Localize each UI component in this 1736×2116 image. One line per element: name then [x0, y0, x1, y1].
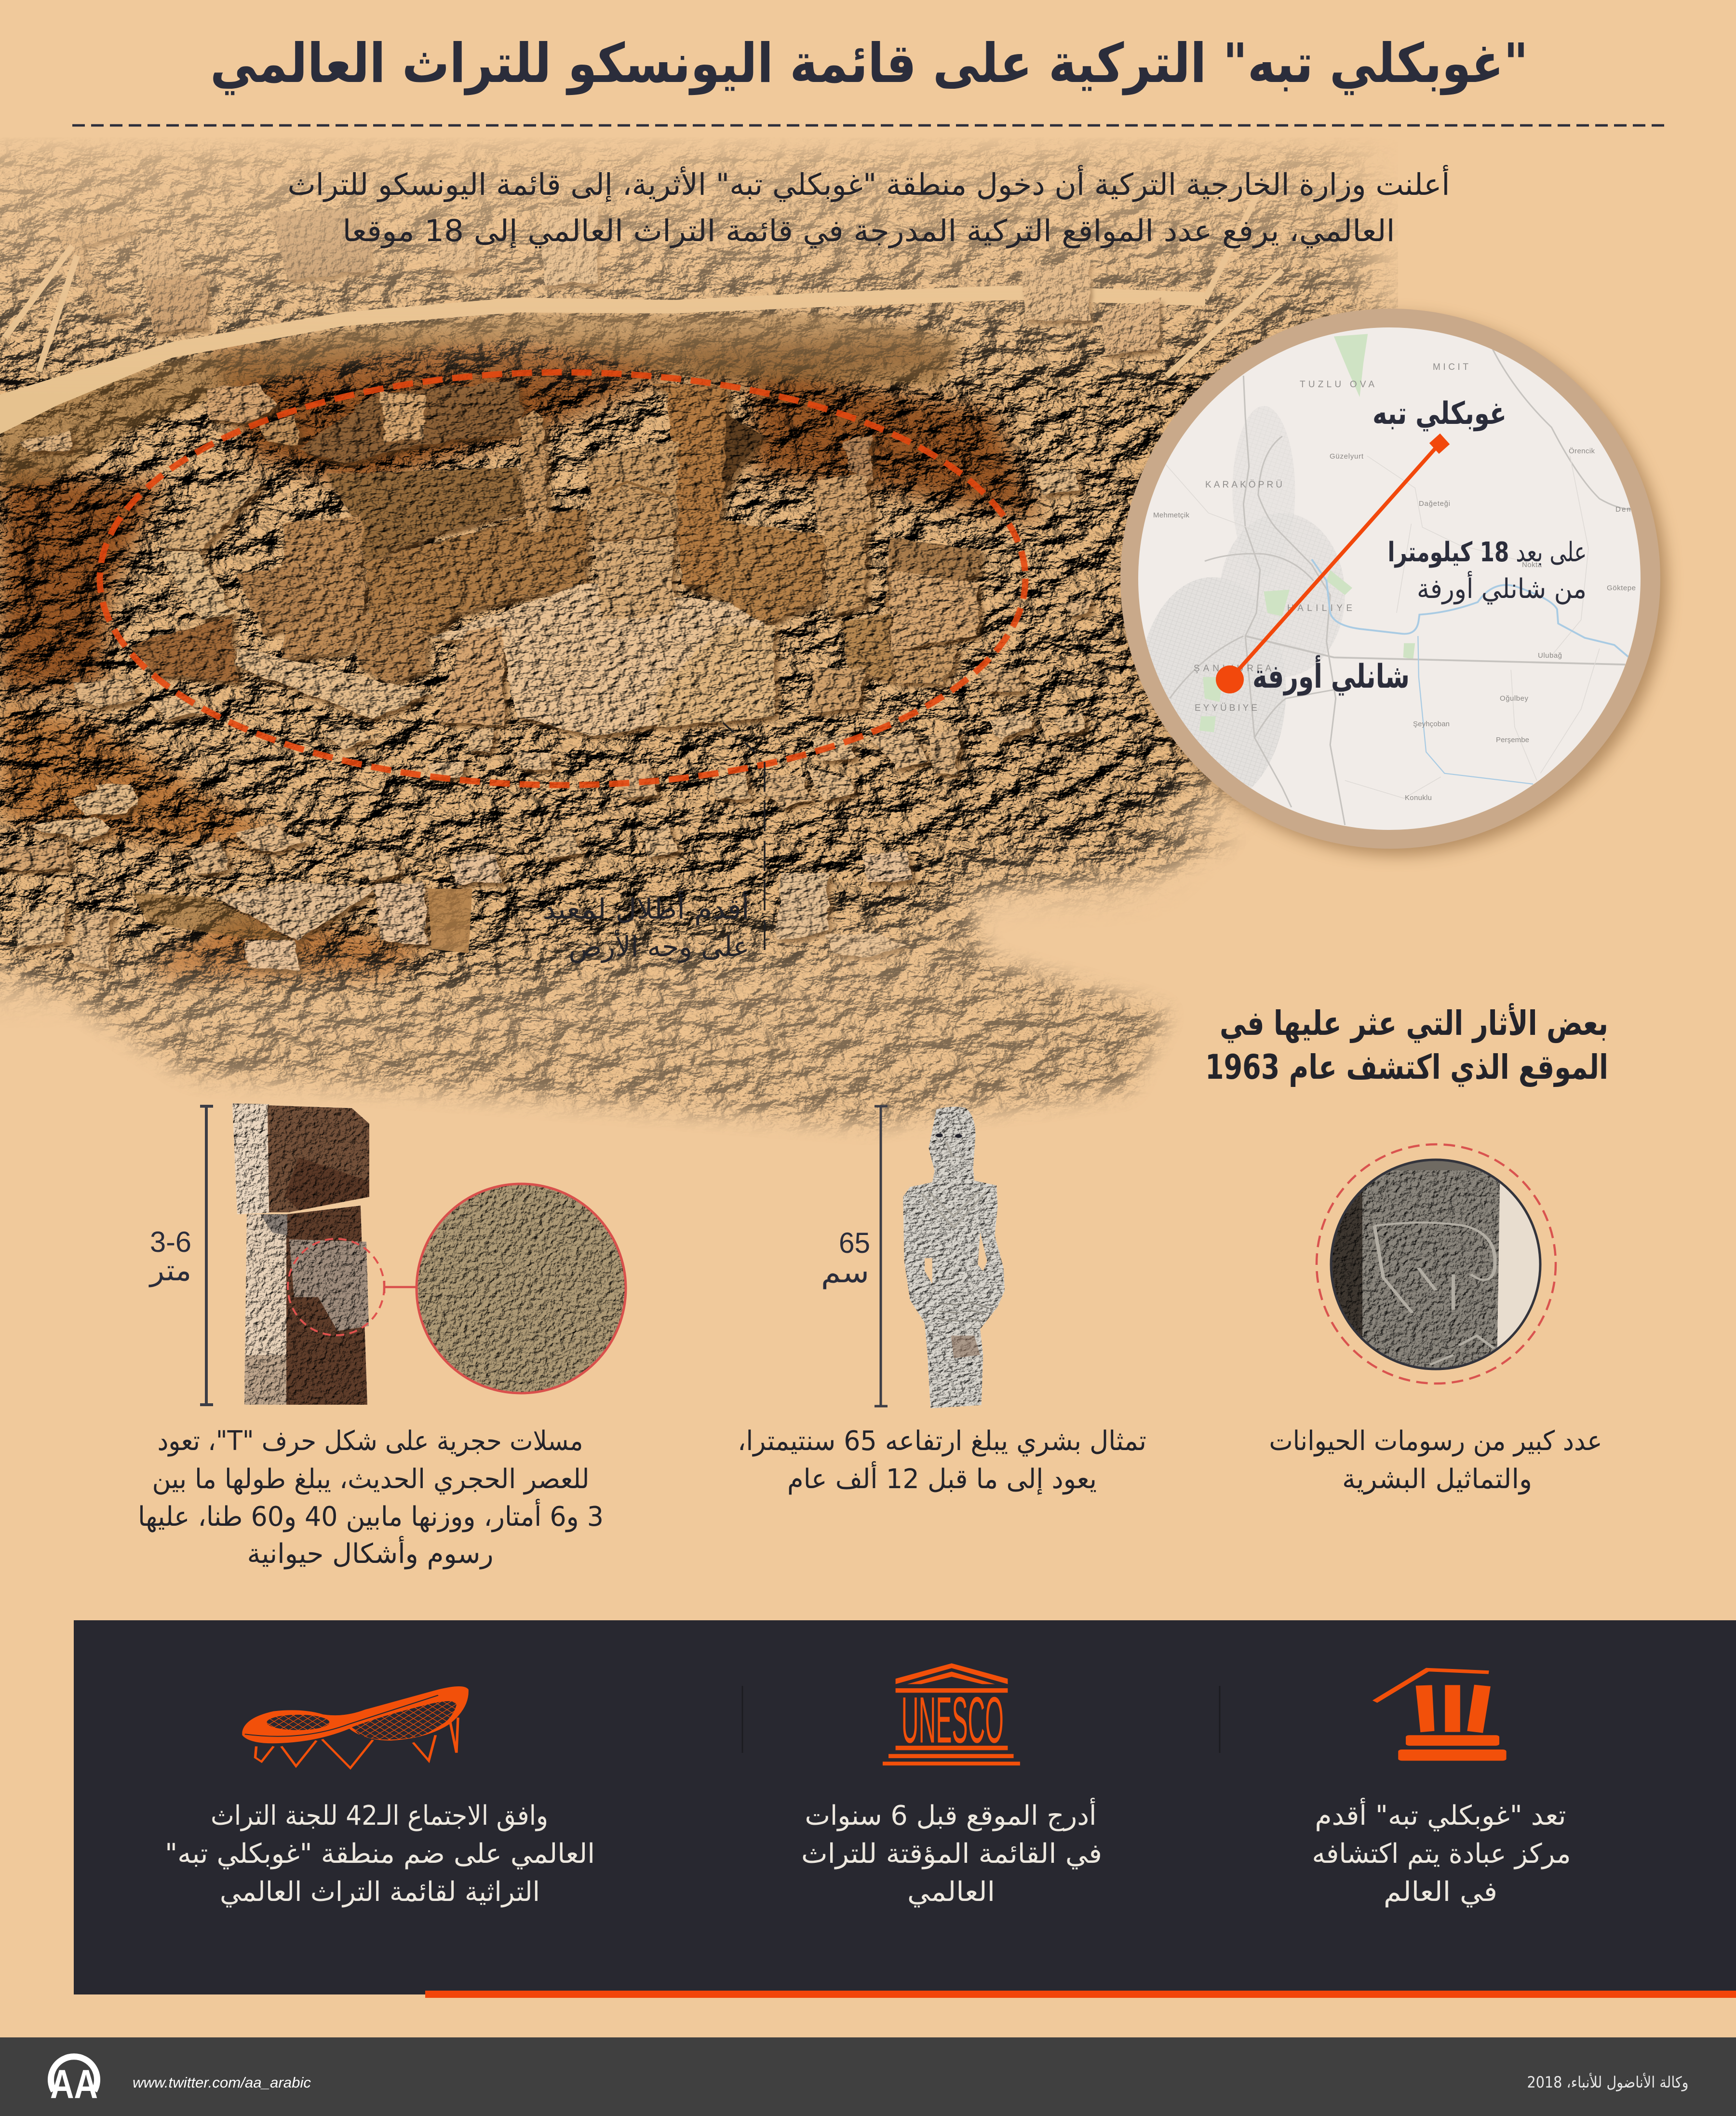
- front stones: [657, 625, 775, 727]
- fact 2: العالمي: [907, 1876, 995, 1908]
- map place names: ŞANLIURFA: [1194, 664, 1271, 674]
- fact 2: في القائمة المؤقتة للتراث: [801, 1838, 1102, 1870]
- marker: Gobekli Tepe: [1429, 434, 1450, 454]
- artifact: T-shaped pillar: [138, 1103, 626, 1570]
- icon: UNESCO: [883, 1663, 1020, 1765]
- animal relief on T pillar: [601, 482, 668, 496]
- fact 1: [165, 1800, 595, 1908]
- map place names: Güzelyurt: [1330, 452, 1364, 461]
- narrow pillar: [519, 410, 549, 532]
- map place names: Nokta: [1522, 561, 1542, 569]
- zoom circle on pillar: [288, 1239, 384, 1335]
- dashed ellipse around temple: [100, 372, 1025, 785]
- dark hollows and excavated walls: [0, 333, 1041, 984]
- top pillars: [380, 392, 424, 441]
- pillar description: [138, 1425, 604, 1570]
- loose foreground stones: [29, 818, 111, 841]
- map place names: Dağeteği: [1419, 500, 1450, 508]
- carving frame: [1331, 1160, 1540, 1369]
- map label: Gobekli Tepe: غوبكلي تبه: [1373, 396, 1507, 432]
- height label: [821, 1227, 870, 1289]
- carving description: والتماثيل البشرية: [1342, 1464, 1532, 1495]
- map label: distance: على بعد 18 كيلومترا: [1387, 537, 1587, 568]
- statue description: [738, 1425, 1146, 1495]
- callout: leader line and temple label: على وجه الأرض: [569, 929, 749, 963]
- map label: distance: من شانلي أورفة: [1417, 571, 1587, 605]
- map place names: Şeyhçoban: [1413, 720, 1450, 728]
- map place names: Konuklu: [1405, 794, 1432, 802]
- map place names: KARAKÖPRÜ: [1205, 480, 1282, 490]
- panel: location map: [1120, 309, 1660, 849]
- section heading: artifacts: بعض الأثار التي عثر عليها في: [1220, 1003, 1608, 1044]
- shadow grasses: [133, 893, 292, 940]
- upper walkway shadow: [0, 313, 964, 487]
- statue description: يعود إلى ما قبل 12 ألف عام: [787, 1461, 1097, 1495]
- title divider: [72, 124, 1668, 126]
- fact 1: التراثية لقائمة التراث العالمي: [220, 1876, 540, 1908]
- carving description: عدد كبير من رسومات الحيوانات: [1269, 1425, 1602, 1457]
- wooden supports: [5, 183, 1282, 376]
- dashed ring: [1317, 1144, 1556, 1384]
- copyright: وكالة الأناضول للأنباء، 2018: [1527, 2073, 1688, 2091]
- wooden walkway in ring: [159, 482, 263, 551]
- map place names: Perşembe: [1496, 736, 1529, 744]
- height label: متر: [148, 1254, 191, 1288]
- panel: key facts: UNESCO: [902, 1683, 1004, 1757]
- right stones: [886, 538, 980, 609]
- flat slab in foreground: [214, 882, 378, 940]
- pillar description: رسوم وأشكال حيوانية: [247, 1536, 494, 1570]
- artifact: animal carvings: [1269, 1144, 1602, 1495]
- carving description: [1269, 1425, 1602, 1495]
- fact 3: مركز عبادة يتم اكتشافه: [1312, 1838, 1571, 1870]
- height label: [148, 1226, 191, 1288]
- main ring stones: [0, 380, 1090, 971]
- relief ring: [417, 1184, 626, 1393]
- relief close-up: [417, 1184, 626, 1393]
- inner dark wall: [299, 380, 524, 462]
- fact 1: وافق الاجتماع الـ42 للجنة التراث: [211, 1800, 548, 1831]
- upper stones and tripods: [56, 205, 1160, 354]
- footer: [0, 2037, 1736, 2116]
- carving photo: [1331, 1160, 1541, 1370]
- pillar description: مسلات حجرية على شكل حرف "T"، تعود: [157, 1425, 583, 1457]
- height scale bar: [875, 1106, 888, 1406]
- title: "غوبكلي تبه" التركية على قائمة اليونسكو للتراث العالمي: [210, 32, 1528, 95]
- height label: 3-6: [150, 1226, 191, 1258]
- section heading: artifacts: الموقع الذي اكتشف عام 1963: [1205, 1047, 1608, 1087]
- map place names: Örencik: [1569, 447, 1595, 455]
- section heading: artifacts: [1205, 1003, 1608, 1087]
- route line: [1230, 444, 1440, 679]
- map frame: [1120, 309, 1660, 849]
- ring floor: [428, 583, 775, 736]
- height label: 65: [839, 1227, 870, 1259]
- upper walkway boards: [0, 285, 1205, 434]
- map place names: HALILIYE: [1287, 603, 1352, 613]
- fact 1: العالمي على ضم منطقة "غوبكلي تبه": [165, 1838, 595, 1870]
- curved stone wall: [365, 508, 587, 635]
- right inner wall: [705, 518, 826, 624]
- map place names: Mehmetçik: [1153, 511, 1190, 519]
- map place names: Ulubağ: [1538, 651, 1562, 660]
- fact 2: [801, 1798, 1102, 1908]
- brown upright stone: [428, 889, 472, 953]
- marker: Sanliurfa: [1216, 665, 1244, 693]
- map place names: Dem: [1615, 505, 1633, 514]
- artifact: human statue: [738, 1106, 1146, 1495]
- accent bar: [425, 1991, 1736, 1998]
- rocky ground texture: [0, 135, 1398, 1157]
- pillar description: للعصر الحجري الحديث، يبلغ طولها ما بين: [152, 1464, 589, 1495]
- rear stone pillar: [651, 383, 727, 585]
- fact 2: أدرج الموقع قبل 6 سنوات: [805, 1798, 1096, 1831]
- fact 3: في العالم: [1384, 1876, 1497, 1908]
- connector: [384, 1281, 417, 1293]
- icon: temple columns: [1375, 1670, 1507, 1761]
- left stones: [284, 514, 364, 658]
- intro text: أعلنت وزارة الخارجية التركية أن دخول منطقة "غوبكلي تبه" الأثرية، إلى قائمة اليونسكو للتراث: [287, 165, 1450, 203]
- background photo: Gobekli Tepe excavation: [0, 135, 1398, 1157]
- central T pillar: [587, 440, 677, 541]
- callout: leader line and temple label: [543, 723, 765, 963]
- height label: سم: [821, 1256, 869, 1289]
- fact 3: تعد "غوبكلي تبه" أقدم: [1315, 1798, 1566, 1831]
- statue description: تمثال بشري يبلغ ارتفاعه 65 سنتيمترا،: [738, 1425, 1146, 1457]
- map label: distance: [1387, 537, 1587, 605]
- statue: [903, 1107, 1005, 1408]
- map place names: EYYÜBIYE: [1195, 703, 1257, 713]
- AA logo: AA: [50, 2062, 98, 2107]
- map place names: Göktepe: [1607, 584, 1636, 592]
- right T pillar: [812, 470, 872, 526]
- map label: Sanliurfa: شانلي أورفة: [1252, 655, 1410, 696]
- map place names: Oğulbey: [1500, 694, 1528, 703]
- map place names: MICIT: [1433, 362, 1468, 372]
- pillar description: 3 و6 أمتار، ووزنها مابين 40 و60 طنا، عليها: [138, 1499, 604, 1533]
- intro text: [287, 165, 1450, 249]
- map base: [1138, 327, 1642, 831]
- panel: key facts: [74, 1620, 1736, 1998]
- height scale bar: [200, 1106, 213, 1405]
- intro text: العالمي، يرفع عدد المواقع التركية المدرجة في قائمة التراث العالمي إلى 18 موقعا: [343, 213, 1395, 249]
- callout: leader line and temple label: أقدم أطلال لمعبد: [543, 891, 749, 925]
- map place names: TUZLU OVA: [1300, 380, 1374, 390]
- fact 3: [1312, 1798, 1571, 1908]
- icon: stadium: [242, 1686, 469, 1768]
- twitter link: www.twitter.com/aa_arabic: [133, 2074, 311, 2091]
- map place names: [1153, 362, 1636, 802]
- pillar: [232, 1103, 369, 1405]
